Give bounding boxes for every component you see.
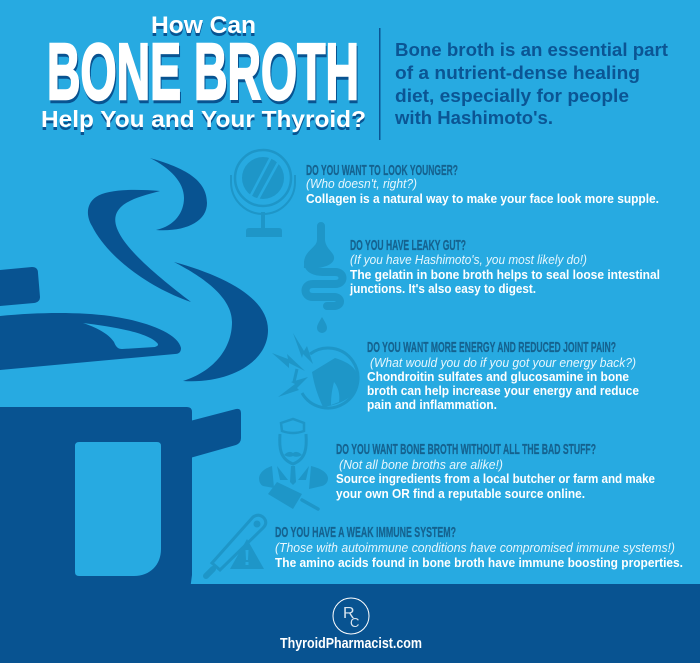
text block: immune system: (Those with autoimmune conditions have compromised immune systems!)	[275, 540, 675, 555]
footer band	[0, 584, 700, 663]
intro text: diet, especially for people	[395, 86, 629, 106]
intro text: Bone broth is an essential part	[395, 40, 668, 60]
intro text	[394, 40, 668, 128]
divider line	[379, 28, 380, 140]
title line: How Can: How Can	[151, 15, 256, 42]
text block: leaky gut: junctions. It's also easy to digest.	[349, 281, 536, 296]
icon: intestine	[304, 226, 342, 333]
text block: look younger: DO YOU WANT TO LOOK YOUNGER?	[306, 162, 458, 179]
text block: look younger	[306, 162, 659, 206]
logo: RC monogram: R	[343, 605, 355, 622]
steam: small swirl	[150, 158, 207, 230]
pot lid	[0, 313, 181, 370]
icon: thermometer and warning triangle	[206, 515, 266, 576]
text block: immune system: DO YOU HAVE A WEAK IMMUNE SYSTEM?	[275, 524, 456, 541]
text block: energy and joint pain	[367, 339, 639, 412]
text block: immune system	[275, 524, 683, 570]
text block: energy and joint pain: (What would you do if you got your energy back?)	[370, 355, 636, 370]
icon: mirror	[231, 150, 295, 237]
intro text: with Hashimoto's.	[394, 108, 553, 128]
title	[41, 12, 366, 135]
pot side handle	[190, 409, 241, 458]
title line: Help You and Your Thyroid?: Help You and Your Thyroid?	[41, 109, 366, 135]
title line: BONE BROTH: BONE BROTH	[47, 27, 359, 116]
text block: bad stuff: your own OR find a reputable source online.	[336, 486, 585, 501]
illustration: steaming pot	[0, 158, 268, 590]
text block: leaky gut: DO YOU HAVE LEAKY GUT?	[350, 237, 466, 254]
logo: RC monogram	[333, 598, 369, 634]
steam: large swirl	[174, 262, 268, 381]
text block: leaky gut	[349, 237, 660, 296]
text block: bad stuff: (Not all bone broths are alike!)	[339, 457, 503, 472]
title line: BONE BROTH	[47, 27, 360, 119]
pot lid handle	[0, 267, 40, 306]
title line: BONE BROTH: BONE BROTH	[48, 30, 360, 119]
text block: bad stuff	[336, 441, 655, 501]
logo: RC monogram: C	[350, 615, 359, 630]
icon: joint with lightning	[272, 333, 358, 408]
intro text: of a nutrient-dense healing	[395, 63, 640, 83]
text block: energy and joint pain: pain and inflammation.	[367, 397, 497, 412]
text block: energy and joint pain: broth can help increase your energy and reduce	[367, 383, 639, 398]
text block: look younger: (Who doesn't, right?)	[306, 176, 417, 191]
pot body	[0, 407, 192, 590]
steam: middle swirl	[88, 190, 191, 302]
text block: look younger: Collagen is a natural way to make your face look more supple.	[306, 191, 659, 206]
footer website text: ThyroidPharmacist.com	[280, 635, 422, 652]
text block: leaky gut: The gelatin in bone broth helps to seal loose intestinal	[350, 267, 660, 282]
text block: leaky gut: (If you have Hashimoto's, you most likely do!)	[350, 252, 587, 267]
text block: energy and joint pain: Chondroitin sulfates and glucosamine in bone	[367, 369, 629, 384]
text block: bad stuff: Source ingredients from a local butcher or farm and make	[336, 471, 655, 486]
icon: butcher	[259, 419, 328, 509]
title line: Help You and Your Thyroid?: Help You and Your Thyroid?	[41, 106, 366, 132]
title line: How Can: How Can	[151, 12, 256, 39]
